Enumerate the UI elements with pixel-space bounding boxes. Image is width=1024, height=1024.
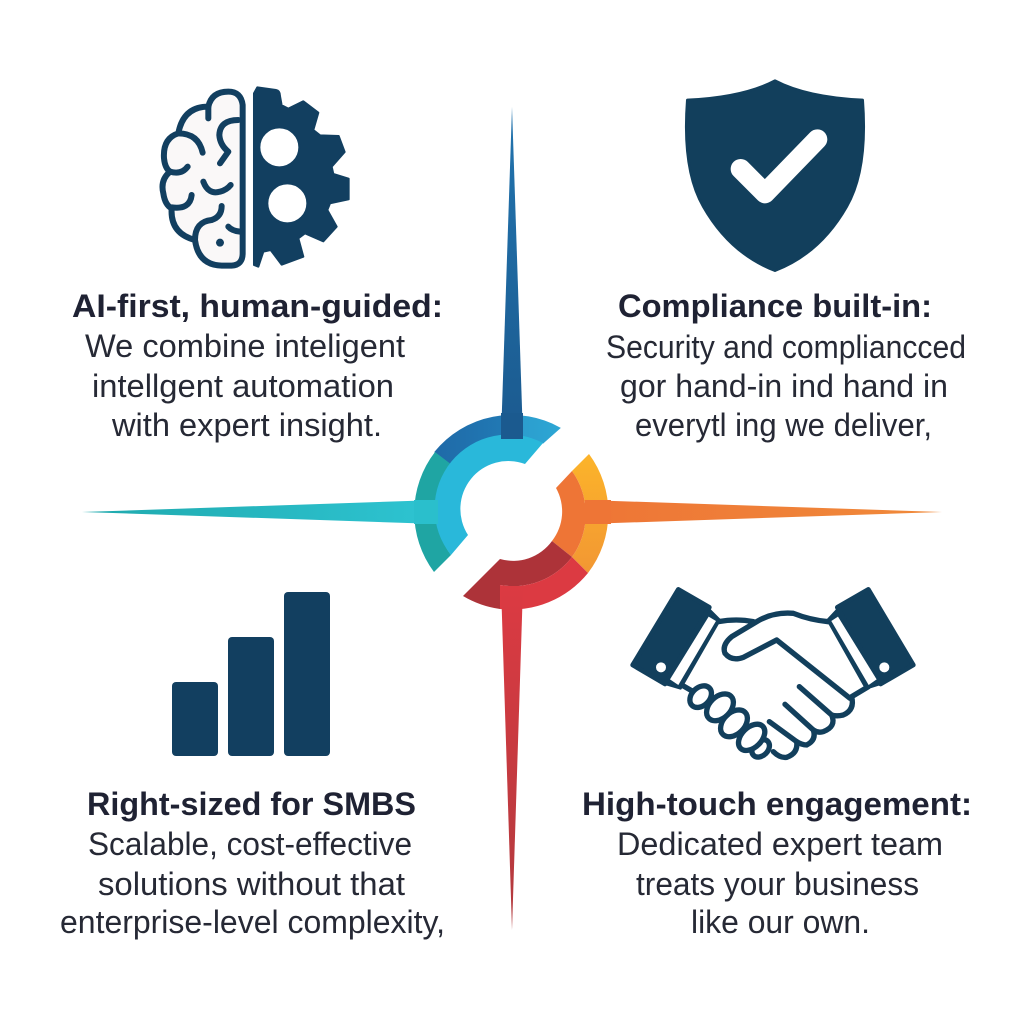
body text: treats your business [636, 866, 919, 902]
body text: gor hand-in ind hand in [620, 368, 948, 404]
brain half [162, 92, 243, 266]
icon: brain and gear [162, 87, 349, 267]
body text [60, 826, 445, 940]
spike: right orange [585, 500, 942, 524]
body text: with expert insight. [111, 407, 382, 443]
body text: everytl ing we deliver, [635, 407, 932, 443]
body text [85, 328, 405, 443]
text block: Compliance built-in [606, 288, 966, 443]
left cuff [633, 589, 720, 689]
body text [617, 826, 943, 940]
body text [606, 329, 966, 443]
body text: solutions without that [98, 866, 405, 902]
icon: bar chart [172, 592, 330, 756]
spike: bottom red [501, 586, 523, 930]
heading: Compliance built-in: [618, 288, 932, 324]
text block: Right-sized for SMBS [60, 786, 445, 940]
spike: left teal [82, 500, 438, 524]
gear half [254, 87, 349, 267]
right cuff [827, 589, 913, 689]
body text: Scalable, cost-effective [88, 826, 412, 862]
text block: High-touch engagement [582, 786, 972, 940]
heading: AI-first, human-guided: [72, 288, 443, 324]
heading: High-touch engagement: [582, 786, 972, 822]
icon: shield with check [686, 81, 864, 271]
body text: enterprise-level complexity, [60, 904, 445, 940]
ring: left arc [414, 413, 560, 572]
body text: Security and compliancced [606, 329, 966, 365]
body text: like our own. [691, 904, 870, 940]
text block: AI-first, human-guided [72, 288, 443, 443]
icon: handshake [633, 589, 913, 761]
body text: intellgent automation [92, 368, 394, 404]
spike: top blue [501, 107, 523, 438]
ring: right arc [463, 454, 611, 610]
body text: We combine inteligent [85, 328, 405, 364]
heading: Right-sized for SMBS [87, 786, 416, 822]
body text: Dedicated expert team [617, 826, 943, 862]
central compass graphic [82, 107, 942, 930]
